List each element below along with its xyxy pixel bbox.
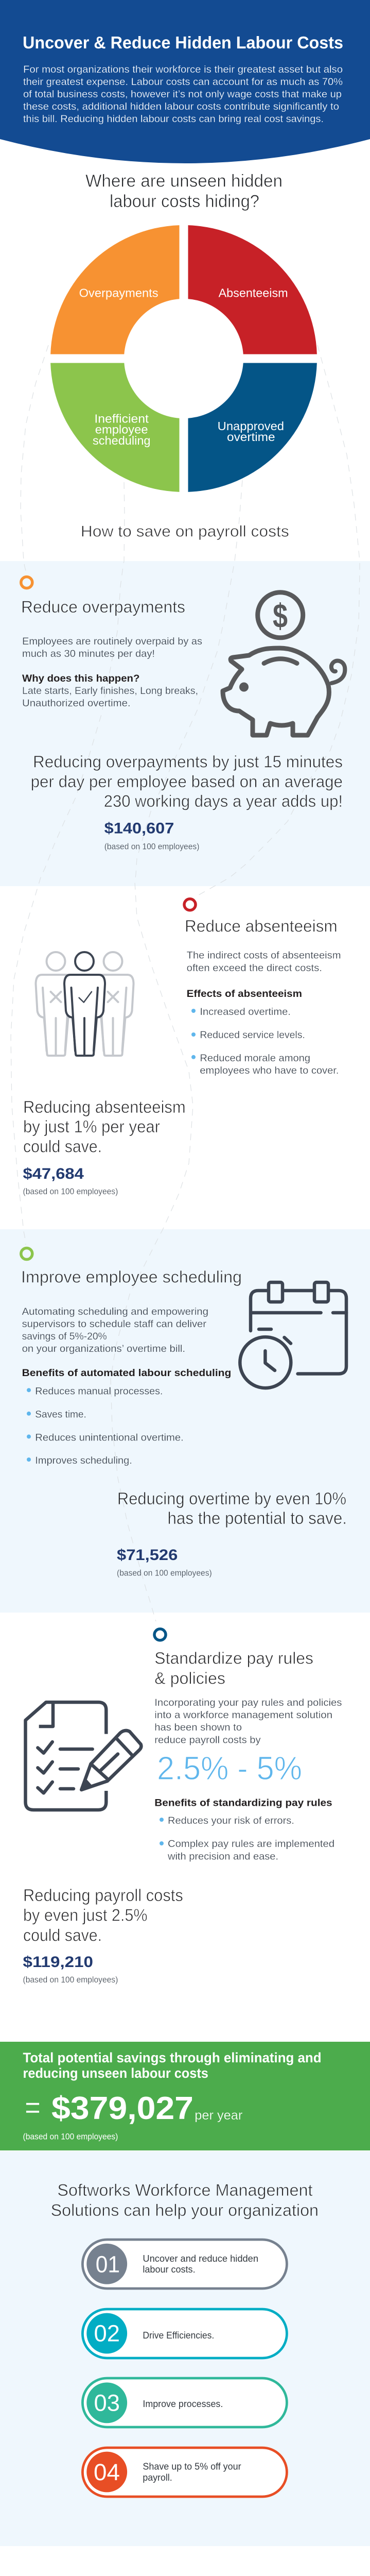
savings statement: has the potential to save.: [168, 1509, 347, 1528]
body text: Why does this happen?: [22, 673, 139, 684]
heading: reducing unseen labour costs: [23, 2065, 208, 2081]
savings statement: Reducing payroll costs: [23, 1886, 183, 1905]
savings figure: $119,210: [23, 1954, 93, 1971]
segment: unapproved overtime: [188, 363, 317, 492]
benefit pill 04: payroll.: [143, 2472, 172, 2483]
savings statement: [31, 753, 343, 810]
bullet list: Increased overtime.: [200, 1006, 291, 1018]
note: (based on 100 employees): [104, 842, 199, 851]
segment: overpayments: [50, 225, 179, 354]
heading: Improve employee scheduling: [21, 1267, 242, 1286]
heading: where are unseen costs hiding: labour costs hiding?: [110, 192, 259, 211]
bullet list: Reduces your risk of errors.: [168, 1815, 294, 1826]
body text: into a workforce management solution: [154, 1709, 332, 1721]
benefit pill 01: 01: [96, 2251, 120, 2277]
savings statement: Reducing absenteeism: [23, 1097, 186, 1116]
intro text: of total business costs, however it’s not only wage costs that make up: [23, 89, 342, 100]
benefit pill 03: [82, 2378, 287, 2427]
bullet list: Saves time.: [35, 1409, 86, 1420]
bullet list: Complex pay rules are implemented: [168, 1838, 334, 1850]
icon: calendar and stopwatch: [240, 1282, 346, 1388]
total figure: per year: [195, 2108, 242, 2123]
header banner: [0, 0, 370, 163]
body text: savings of 5%-20%: [22, 1331, 107, 1342]
heading: where are unseen costs hiding: Where are unseen hidden: [85, 171, 283, 191]
note: (based on 100 employees): [23, 1187, 118, 1196]
savings statement: Reducing overtime by even 10%: [117, 1489, 346, 1508]
body text: Late starts, Early finishes, Long breaks,: [22, 685, 198, 697]
subheading: Benefits of standardizing pay rules: [154, 1797, 332, 1808]
body text: supervisors to schedule staff can deliver: [22, 1318, 207, 1330]
body text: Unauthorized overtime.: [22, 698, 131, 709]
intro text: For most organizations their workforce is their greatest asset but also: [23, 64, 343, 75]
body text: The indirect costs of absenteeism: [187, 950, 341, 961]
body text: [187, 950, 341, 974]
total figure: [25, 2090, 242, 2126]
heading: & policies: [154, 1669, 225, 1687]
heading: Standardize pay rules: [154, 1649, 313, 1667]
marker: blue ring: [154, 1629, 166, 1640]
benefit pill 02: Drive Efficiencies.: [143, 2330, 214, 2341]
segment: overpayments: Overpayments: [79, 286, 158, 300]
segment: absenteeism: [188, 225, 317, 354]
savings figure: $47,684: [23, 1165, 84, 1182]
note: (based on 100 employees): [23, 2132, 118, 2142]
body text: Employees are routinely overpaid by as: [22, 636, 202, 647]
savings statement: [117, 1489, 347, 1528]
heading: [51, 2181, 319, 2219]
panel: improve employee scheduling: [21, 1248, 347, 1578]
marker: orange ring: [21, 577, 32, 588]
panel: reduce absenteeism: [23, 899, 341, 1196]
heading: [154, 1649, 313, 1687]
segment: inefficient employee scheduling: [50, 363, 179, 492]
bullet list: [191, 1006, 339, 1076]
panel: softworks benefits: [51, 2181, 319, 2497]
body text: has been shown to: [154, 1722, 242, 1733]
bullet list: [27, 1385, 184, 1466]
heading: Reduce absenteeism: [185, 917, 338, 936]
body text: [22, 636, 202, 709]
benefit pill 02: 02: [94, 2320, 120, 2347]
heading: where are unseen costs hiding: [85, 171, 283, 211]
savings statement: by even just 2.5%: [23, 1906, 148, 1925]
intro text: these costs, additional hidden labour costs contribute significantly to: [23, 101, 339, 112]
benefit pill 01: [82, 2240, 287, 2289]
subheading: Benefits of automated labour scheduling: [22, 1367, 231, 1379]
savings figure: $140,607: [104, 820, 174, 837]
body text: on your organizations’ overtime bill.: [22, 1343, 185, 1354]
note: (based on 100 employees): [117, 1568, 212, 1578]
benefit pill 04: Shave up to 5% off your: [143, 2461, 241, 2471]
intro text: this bill. Reducing hidden labour costs can bring real cost savings.: [23, 113, 324, 125]
intro text: [23, 64, 343, 125]
title: Uncover & Reduce Hidden Labour Costs: [23, 33, 343, 52]
body text: Incorporating your pay rules and policies: [154, 1697, 342, 1708]
segment: unapproved overtime: overtime: [227, 430, 275, 444]
body text: Automating scheduling and empowering: [22, 1306, 208, 1317]
bullet list: Reduced morale among: [200, 1053, 310, 1064]
savings statement: could save.: [23, 1137, 102, 1156]
subheading: Effects of absenteeism: [187, 988, 302, 999]
bullet list: Reduces unintentional overtime.: [35, 1432, 184, 1443]
marker: red ring: [184, 899, 196, 910]
savings statement: Reducing overpayments by just 15 minutes: [33, 753, 343, 771]
heading: Reduce overpayments: [21, 598, 185, 616]
bullet list: [160, 1815, 334, 1862]
segment: unapproved overtime: Unapproved: [218, 419, 284, 433]
marker: green ring: [21, 1248, 32, 1259]
bullet list: Improves scheduling.: [35, 1455, 132, 1466]
body text: much as 30 minutes per day!: [22, 648, 155, 659]
note: (based on 100 employees): [23, 1975, 118, 1985]
total figure: $379,027: [51, 2091, 193, 2126]
body text: often exceed the direct costs.: [187, 962, 322, 974]
heading: how to save: How to save on payroll costs: [81, 522, 289, 540]
panel: total potential savings: [0, 2042, 370, 2150]
highlight: percentage range: 2.5% - 5%: [157, 1750, 302, 1787]
savings figure: $71,526: [117, 1547, 178, 1564]
icon: piggy bank and coin: [223, 592, 345, 735]
panel: reduce overpayments: [21, 577, 345, 851]
benefit pill 03: 03: [94, 2389, 120, 2416]
bullet list: with precision and ease.: [167, 1851, 278, 1862]
savings statement: [23, 1886, 183, 1944]
donut chart: hidden costs: [50, 225, 317, 492]
bullet list: Reduces manual processes.: [35, 1385, 163, 1397]
savings statement: could save.: [23, 1925, 102, 1944]
heading: Softworks Workforce Management: [57, 2181, 313, 2199]
body text: reduce payroll costs by: [154, 1734, 261, 1745]
benefit pill 04: 04: [94, 2459, 120, 2485]
panel: standardize pay rules: [23, 1629, 342, 1985]
segment: inefficient employee scheduling: Inefficient: [94, 412, 149, 426]
icon: piggy bank and coin: $: [273, 597, 288, 635]
intro text: their greatest expense. Labour costs can account for as much as 70%: [23, 76, 343, 88]
heading: [23, 2050, 321, 2081]
total figure: =: [25, 2090, 41, 2125]
icon: checklist and pencil: [26, 1702, 141, 1810]
segment: inefficient employee scheduling: scheduling: [93, 434, 150, 447]
savings statement: per day per employee based on an average: [31, 772, 343, 791]
benefit pill 02: [82, 2309, 287, 2358]
benefit pill 04: [82, 2448, 287, 2497]
segment: inefficient employee scheduling: employee: [95, 423, 148, 436]
benefit pill 01: Uncover and reduce hidden: [143, 2253, 258, 2264]
benefit pill 03: Improve processes.: [143, 2399, 223, 2409]
icon: three people: [36, 952, 134, 1056]
segment: absenteeism: Absenteeism: [219, 286, 288, 300]
savings statement: by just 1% per year: [23, 1117, 160, 1136]
bullet list: employees who have to cover.: [200, 1065, 339, 1076]
benefit pill 01: labour costs.: [143, 2264, 196, 2275]
bullet list: Reduced service levels.: [200, 1029, 305, 1041]
body text: [22, 1306, 208, 1354]
heading: Solutions can help your organization: [51, 2201, 319, 2219]
savings statement: 230 working days a year adds up!: [104, 792, 343, 810]
body text: [154, 1697, 342, 1745]
savings statement: [23, 1097, 186, 1156]
heading: Total potential savings through eliminating and: [23, 2050, 321, 2065]
